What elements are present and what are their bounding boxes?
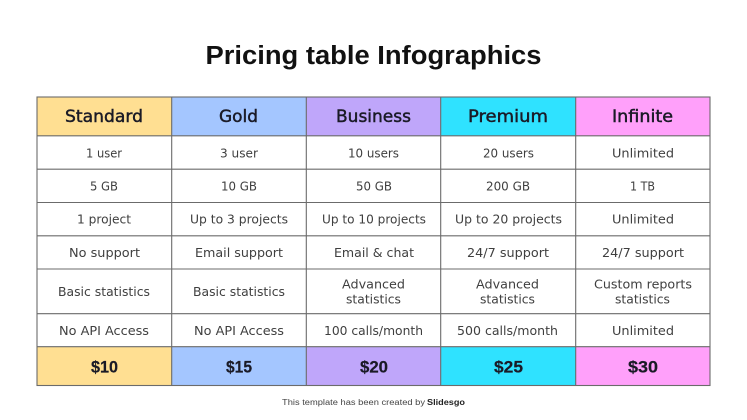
column: Gold: Email support bbox=[195, 245, 283, 260]
column: Gold bbox=[190, 107, 288, 376]
footer credit bbox=[282, 398, 465, 407]
column: Gold: Up to 3 projects bbox=[190, 212, 288, 226]
column: Infinite: Unlimited bbox=[612, 146, 674, 160]
column: Infinite: $30 bbox=[628, 358, 658, 376]
column: Standard: No API Access bbox=[59, 323, 149, 338]
column: Standard: 1 user bbox=[86, 146, 123, 160]
column: Infinite: statistics bbox=[615, 292, 670, 306]
column: Premium: 200 GB bbox=[486, 178, 530, 194]
column: Standard: 5 GB bbox=[90, 178, 118, 194]
column: Standard: Standard bbox=[65, 107, 143, 126]
column: Infinite: Unlimited bbox=[612, 323, 674, 338]
column: Gold: $15 bbox=[226, 358, 252, 376]
column: Infinite: Custom reports bbox=[594, 276, 692, 292]
column: Infinite bbox=[594, 107, 692, 376]
column: Premium: statistics bbox=[480, 292, 535, 306]
footer credit: Slidesgo bbox=[427, 398, 465, 407]
column: Infinite: Unlimited bbox=[612, 212, 674, 226]
column: Infinite: 1 TB bbox=[630, 178, 655, 194]
column: Gold: Gold bbox=[219, 107, 258, 126]
column: Business: statistics bbox=[346, 292, 401, 306]
column: Gold: No API Access bbox=[194, 323, 284, 338]
column: Business: $20 bbox=[360, 358, 388, 376]
column: Business: Advanced bbox=[342, 276, 405, 292]
footer credit: This template has been created by bbox=[282, 398, 425, 407]
column: Business: Email & chat bbox=[334, 245, 414, 260]
column: Business bbox=[322, 107, 426, 376]
column: Gold: 3 user bbox=[220, 146, 259, 160]
column: Premium: 20 users bbox=[483, 146, 534, 160]
column: Premium bbox=[455, 107, 562, 376]
panel: header colour cells bbox=[37, 97, 710, 136]
column: Premium: Premium bbox=[468, 107, 548, 126]
title: Pricing table Infographics bbox=[206, 42, 542, 70]
column: Standard: $10 bbox=[91, 358, 118, 376]
column: Gold: Basic statistics bbox=[193, 284, 285, 299]
column: Premium: 500 calls/month bbox=[457, 323, 558, 338]
column: Standard: Basic statistics bbox=[58, 284, 150, 299]
panel: price colour cells bbox=[37, 347, 710, 386]
column: Premium: 24/7 support bbox=[467, 245, 549, 260]
column: Standard: No support bbox=[69, 245, 140, 260]
column: Business: Business bbox=[336, 107, 411, 126]
column: Premium: Up to 20 projects bbox=[455, 212, 562, 226]
column: Business: 10 users bbox=[348, 146, 399, 160]
column: Gold: 10 GB bbox=[221, 178, 257, 194]
pricing table bbox=[37, 97, 710, 386]
column: Standard bbox=[58, 107, 150, 376]
column: Premium: $25 bbox=[494, 358, 523, 376]
column: Standard: 1 project bbox=[77, 212, 131, 226]
column: Infinite: 24/7 support bbox=[602, 245, 684, 260]
column: Business: Up to 10 projects bbox=[322, 212, 426, 226]
panel: white table background bbox=[37, 97, 710, 386]
column: Premium: Advanced bbox=[476, 276, 539, 292]
column: Infinite: Infinite bbox=[612, 107, 673, 126]
column: Business: 100 calls/month bbox=[324, 323, 423, 338]
column: Business: 50 GB bbox=[356, 178, 392, 194]
